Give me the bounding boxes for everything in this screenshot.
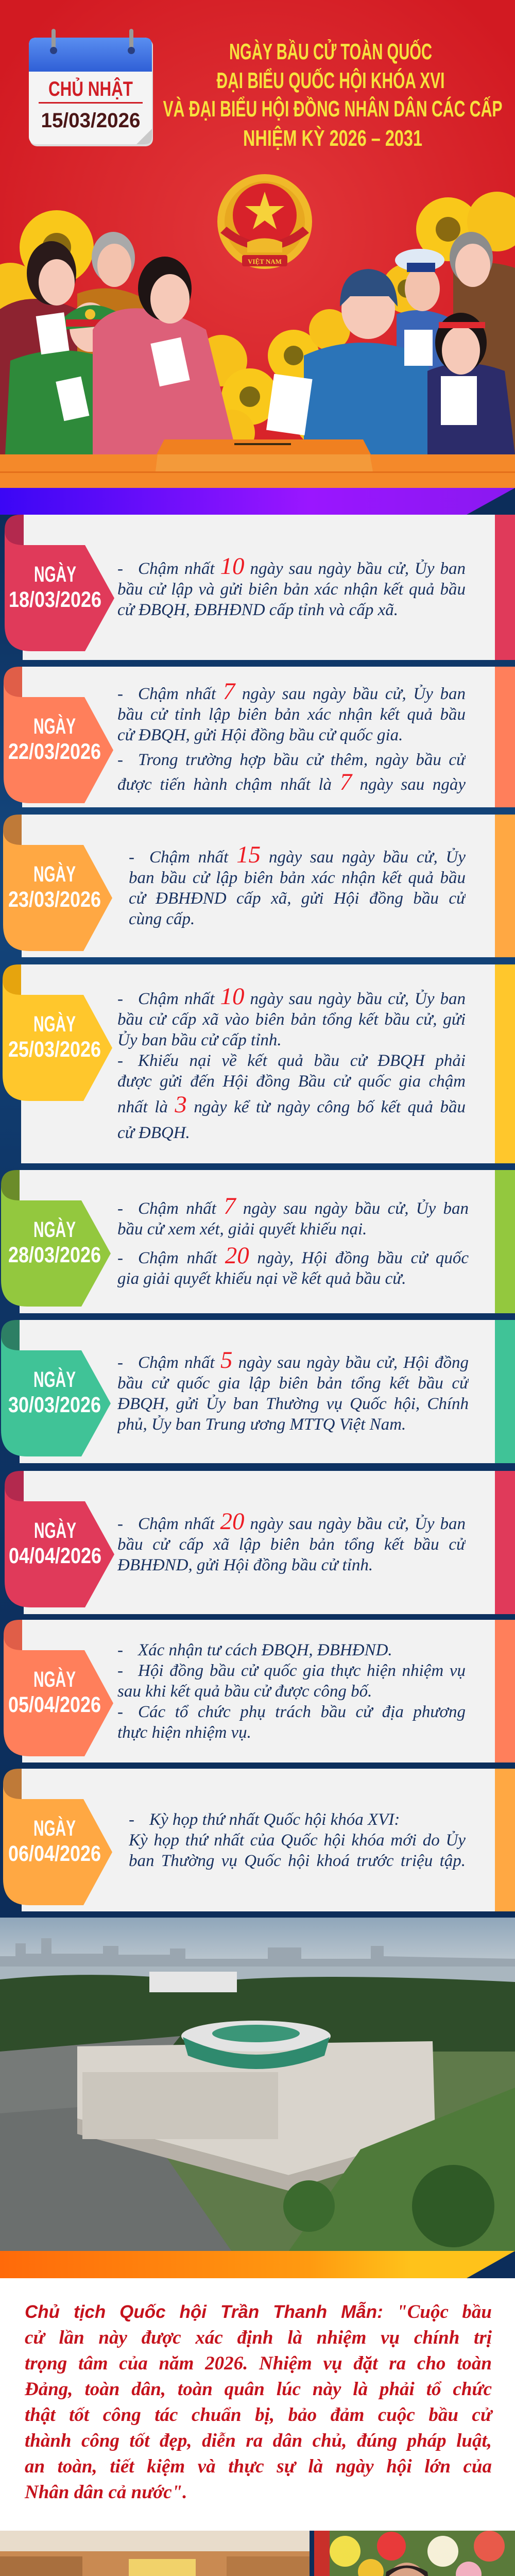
text: row 8: sau khi kết quả bầu cử được công bố. [117, 1682, 372, 1700]
text: row 4: được gửi đến Hội đồng Bầu cử quốc gia chậm [117, 1072, 466, 1091]
text: row 8: - [117, 1661, 123, 1680]
text: row 1: bầu cử lập và gửi biên bản xác nhận kết quả bầu [117, 580, 466, 599]
quote: Chairman Tran Thanh Man: Nhân dân cả nước". [25, 2482, 187, 2503]
text: row 7: - [117, 1515, 123, 1533]
banner: 05/04/2026 [4, 1620, 113, 1756]
calendar icon [29, 29, 153, 146]
text: row 5: gia giải quyết khiếu nại về kết quả bầu cử. [117, 1269, 406, 1288]
banner: 23/03/2026 [3, 815, 112, 951]
banner: 22/03/2026 [4, 667, 113, 803]
text: row 3 [129, 841, 466, 928]
row 6: 30/03/2026 [1, 1320, 515, 1463]
banner: 30/03/2026: NGÀY [33, 1367, 76, 1392]
banner: 04/04/2026: NGÀY [34, 1518, 76, 1543]
text: row 5: Chậm nhất 20 ngày, Hội đồng bầu cử quốc [138, 1242, 469, 1269]
text: row 6: - [117, 1353, 123, 1372]
banner: 22/03/2026: 22/03/2026 [8, 739, 101, 764]
text: row 5: - [117, 1199, 123, 1218]
text: row 4 [117, 983, 466, 1142]
text: row 1: - [117, 560, 123, 578]
row 9: 06/04/2026 [3, 1769, 515, 1911]
text: row 4: nhất là 3 ngày kể từ ngày công bố kết quả bầu [117, 1091, 466, 1118]
text: row 8: - [117, 1702, 123, 1721]
banner: 05/04/2026: NGÀY [33, 1667, 76, 1692]
text: row 4: bầu cử cấp xã vào biên bản tổng kết bầu cử, gửi [117, 1010, 466, 1029]
ballot box and table [0, 439, 515, 488]
text: row 5 [117, 1193, 469, 1288]
text: row 2: cử ĐBQH, gửi Hội đồng bầu cử quốc gia. [117, 725, 403, 744]
text: row 8: Xác nhận tư cách ĐBQH, ĐBHĐND. [138, 1640, 392, 1659]
text: row 6: phủ, Ủy ban Trung ương MTTQ Việt Nam. [117, 1415, 406, 1434]
row 7: 04/04/2026 [5, 1471, 515, 1614]
banner: 30/03/2026: 30/03/2026 [8, 1393, 101, 1417]
quote: Chairman Tran Thanh Man: thật tốt công tác chuẩn bị, bảo đảm cuộc bầu cử [25, 2404, 492, 2426]
banner: 18/03/2026 [5, 515, 114, 651]
text: row 9 [129, 1810, 466, 1870]
row 3: 23/03/2026 [3, 815, 515, 957]
quote: Chairman Tran Thanh Man: Chủ tịch Quốc hội Trần Thanh Mẫn: "Cuộc bầu [25, 2301, 492, 2323]
text: row 5: - [117, 1249, 123, 1267]
text: row 3: - [129, 848, 134, 867]
quote: Chairman Tran Thanh Man: trọng tâm của năm 2026. Nhiệm vụ đặt ra cho toàn [25, 2353, 492, 2374]
text: row 5: bầu cử xem xét, giải quyết khiếu nại. [117, 1220, 367, 1239]
banner: 28/03/2026: 28/03/2026 [8, 1243, 101, 1267]
text: row 4: Ủy ban bầu cử cấp tỉnh. [117, 1031, 282, 1049]
text: row 9: Kỳ họp thứ nhất của Quốc hội khóa mới do Ủy [129, 1831, 466, 1850]
text: row 2 [117, 678, 466, 795]
icon: national emblem [217, 174, 312, 269]
text: row 4: - [117, 1052, 123, 1070]
quote: Chairman Tran Thanh Man [25, 2301, 493, 2503]
header poster [0, 0, 515, 515]
banner: 04/04/2026: 04/04/2026 [9, 1544, 101, 1568]
banner: 06/04/2026: NGÀY [33, 1816, 76, 1841]
text: row 2: Chậm nhất 7 ngày sau ngày bầu cử, Ủy ban [138, 678, 466, 705]
text: row 4: Chậm nhất 10 ngày sau ngày bầu cử, Ủy ban [138, 983, 466, 1010]
text: row 6 [117, 1347, 469, 1434]
text: row 7 [117, 1508, 466, 1574]
title [163, 38, 503, 151]
text: row 1 [117, 553, 466, 619]
photo: meeting room [0, 2531, 310, 2576]
text: row 2: được tiến hành chậm nhất là 7 ngày sau ngày [117, 769, 466, 795]
sunflowers [0, 192, 515, 456]
text: row 5: Chậm nhất 7 ngày sau ngày bầu cử, Ủy ban [138, 1193, 469, 1219]
text: row 7: bầu cử cấp xã lập biên bản tổng kết bầu cử [117, 1535, 466, 1554]
banner: 28/03/2026: NGÀY [33, 1217, 76, 1242]
text: row 6: ĐBQH, gửi Ủy ban Thường vụ Quốc hội, Chính [117, 1395, 469, 1413]
row 4: 25/03/2026 [3, 964, 515, 1163]
banner: 18/03/2026: 18/03/2026 [9, 587, 101, 612]
title: NHIỆM KỲ 2026 – 2031 [243, 125, 422, 151]
quote: Chairman Tran Thanh Man: an toàn, tiết kiệm và thực sự là ngày hội lớn của [25, 2456, 492, 2477]
text: row 3: cử ĐBHĐND cấp xã, gửi Hội đồng bầu cử [129, 889, 466, 908]
calendar icon: CHỦ NHẬT [48, 77, 133, 100]
text: row 3: cùng cấp. [129, 910, 195, 928]
text: row 6: bầu cử quốc gia lập biên bản tổng kết bầu cử [117, 1374, 469, 1393]
text: row 2: bầu cử tỉnh lập biên bản xác nhận kết quả bầu [117, 705, 466, 723]
quote: Chairman Tran Thanh Man: cử lần này được xác định là nhiệm vụ chính trị [25, 2327, 492, 2348]
banner: 30/03/2026 [1, 1320, 111, 1456]
quote: Chairman Tran Thanh Man: Đảng, toàn dân, toàn quân lúc này là phải tổ chức [25, 2379, 492, 2400]
banner: 23/03/2026: NGÀY [33, 862, 76, 887]
text: row 8 [117, 1640, 466, 1741]
text: row 6: Chậm nhất 5 ngày sau ngày bầu cử, Hội đồng [138, 1347, 469, 1374]
text: row 8: Hội đồng bầu cử quốc gia thực hiện nhiệm vụ [138, 1661, 466, 1680]
row 8: 05/04/2026 [4, 1620, 515, 1762]
banner: 06/04/2026 [3, 1769, 112, 1905]
banner: 28/03/2026 [1, 1170, 111, 1307]
banner: 25/03/2026: 25/03/2026 [8, 1037, 101, 1062]
text: row 9: Kỳ họp thứ nhất Quốc hội khóa XVI: [149, 1810, 400, 1829]
banner: 06/04/2026: 06/04/2026 [8, 1841, 101, 1866]
people group left [0, 232, 237, 454]
text: row 1: cử ĐBQH, ĐBHĐND cấp tỉnh và cấp xã. [117, 601, 398, 619]
text: row 9: - [129, 1810, 134, 1829]
row 2: 22/03/2026 [4, 667, 515, 807]
text: row 4: Khiếu nại về kết quả bầu cử ĐBQH phải [138, 1052, 466, 1070]
text: row 2: Trong trường hợp bầu cử thêm, ngày bầu cử [138, 750, 466, 769]
photo: National Assembly building [0, 1918, 515, 2251]
banner: 04/04/2026 [5, 1471, 114, 1607]
text: row 3: Chậm nhất 15 ngày sau ngày bầu cử, Ủy [149, 841, 466, 868]
text: row 7: Chậm nhất 20 ngày sau ngày bầu cử, Ủy ban [138, 1508, 466, 1535]
text: row 8: thực hiện nhiệm vụ. [117, 1723, 251, 1741]
text: row 4: cử ĐBQH. [117, 1124, 190, 1142]
text: row 2: - [117, 684, 123, 703]
orange band 1 [0, 2251, 515, 2278]
text: row 1: Chậm nhất 10 ngày sau ngày bầu cử, Ủy ban [138, 553, 466, 580]
banner: 25/03/2026 [3, 964, 112, 1101]
text: row 2: - [117, 750, 123, 769]
banner: 22/03/2026: NGÀY [33, 714, 76, 739]
text: row 9: ban Thường vụ Quốc hội khoá trước triệu tập. [129, 1852, 466, 1870]
icon: national emblem: VIỆT NAM [248, 258, 282, 265]
banner: 25/03/2026: NGÀY [33, 1012, 76, 1037]
text: row 7: ĐBHĐND, gửi Hội đồng bầu cử tỉnh. [117, 1556, 373, 1574]
text: row 4: - [117, 990, 123, 1008]
banner: 05/04/2026: 05/04/2026 [8, 1692, 101, 1717]
text: row 8: - [117, 1640, 123, 1659]
text: row 8: Các tổ chức phụ trách bầu cử địa phương [138, 1702, 466, 1721]
quote: Chairman Tran Thanh Man: thành công tốt đẹp, diễn ra dân chủ, đúng pháp luật, [25, 2430, 492, 2451]
people group right [266, 232, 515, 454]
row 1: 18/03/2026 [5, 515, 515, 660]
text: row 3: ban bầu cử lập biên bản xác nhận kết quả bầu [129, 869, 466, 887]
banner: 23/03/2026: 23/03/2026 [8, 887, 101, 912]
photo: chairman speaking [314, 2531, 515, 2576]
timeline background [0, 515, 515, 1919]
banner: 18/03/2026: NGÀY [34, 562, 76, 587]
purple band [0, 488, 515, 515]
calendar icon: 15/03/2026 [41, 109, 140, 132]
row 5: 28/03/2026 [1, 1170, 515, 1313]
